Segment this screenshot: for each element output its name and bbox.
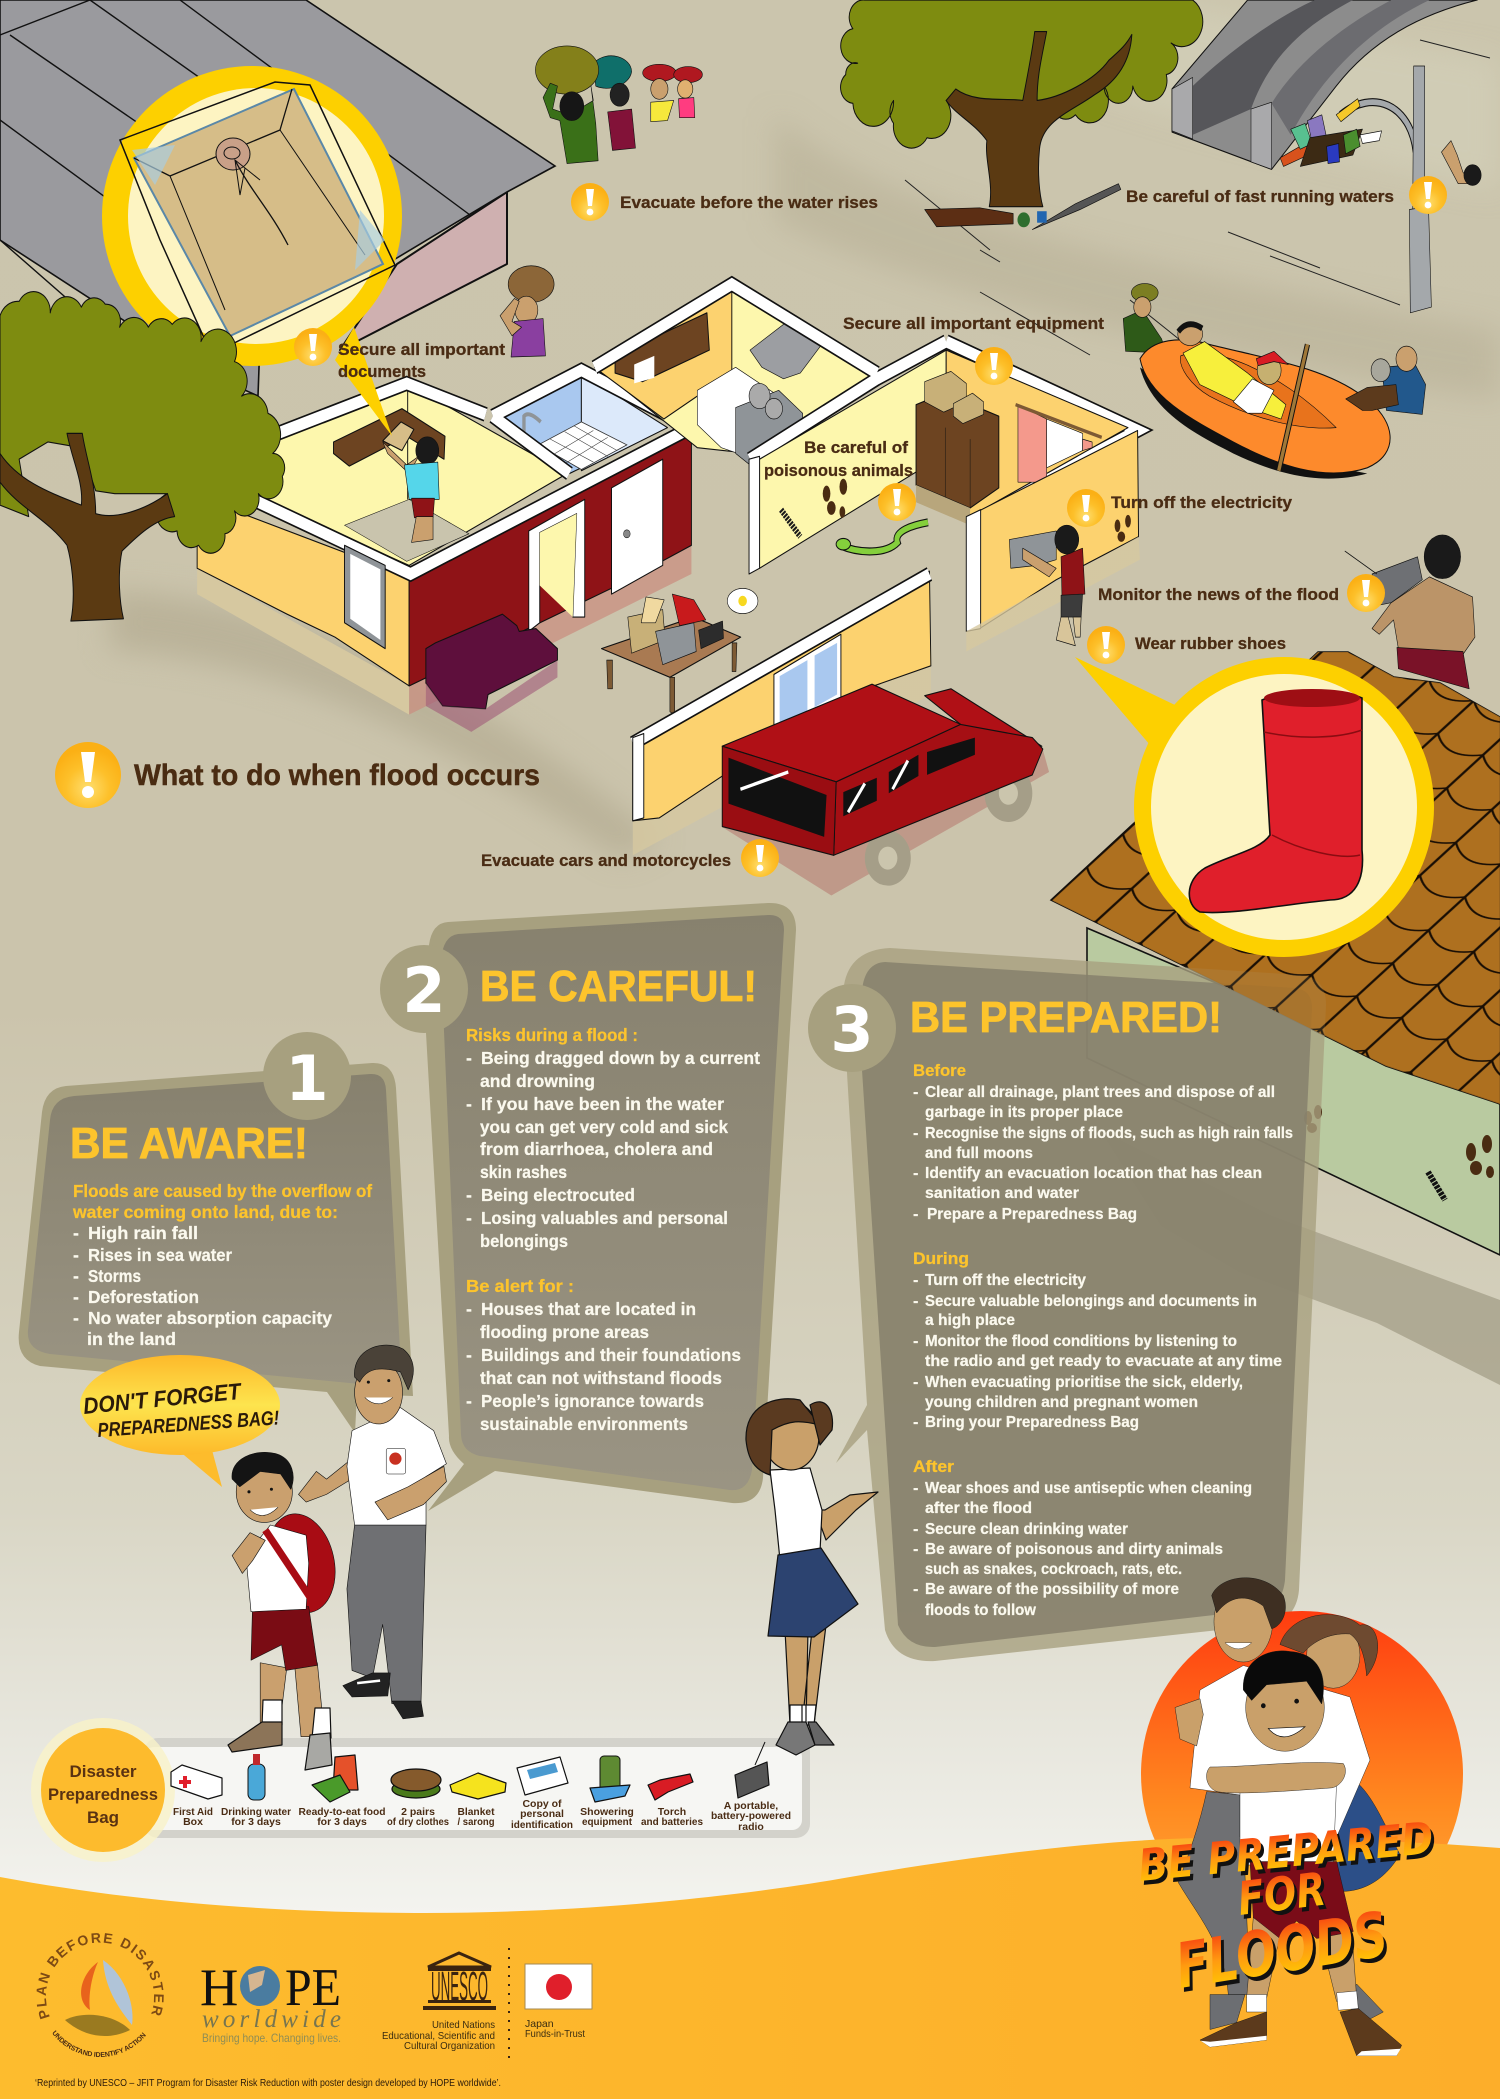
white wall tops [594, 284, 1138, 519]
panel 3: be prepared: Recognise the signs of floods, such as high rain falls [925, 1125, 1293, 1142]
label: poisonous animals: Be careful of [804, 438, 908, 457]
panel 3: be prepared: Prepare a Preparedness Bag [927, 1206, 1137, 1223]
logo: unesco: Educational, Scientific and [382, 2030, 495, 2042]
red front wall [409, 428, 691, 686]
debris at tree [925, 208, 1013, 227]
shower label [580, 1806, 634, 1828]
logo: japan funds-in-trust: Japan [525, 2018, 554, 2030]
clothes label [387, 1806, 449, 1828]
icon: torch [648, 1774, 693, 1800]
credit line: ‘Reprinted by UNESCO – JFIT Program for Disaster Risk Reduction with poster design developed by HOPE worldwide’. [35, 2078, 501, 2089]
bag badge: Preparedness [48, 1785, 158, 1804]
panel 3: be prepared: During [913, 1250, 969, 1268]
logo: hope worldwide: H [200, 1959, 238, 2017]
panel 3: be prepared: When evacuating prioritise the sick, elderly, [925, 1374, 1243, 1391]
panel 1: be aware: 1 [285, 1042, 329, 1115]
title: be prepared for floods: FLOODS [1171, 1897, 1393, 2003]
panel 2: be careful: Houses that are located in [481, 1299, 696, 1319]
insects on wall [1304, 1105, 1494, 1178]
panel 3: be prepared: Monitor the flood conditions by listening to [925, 1333, 1237, 1350]
panel 2: be careful: - [466, 1185, 472, 1205]
label: secure equipment [843, 314, 1104, 385]
character: girl [746, 1399, 878, 1755]
title: be prepared for floods: FLOODS [1174, 1901, 1396, 2007]
torch label [641, 1806, 703, 1828]
logo: plan before disaster: PLAN BEFORE DISASTER [36, 1933, 164, 2020]
blanket label: Blanket [458, 1806, 495, 1818]
panel 2: be careful: BE CAREFUL! [480, 962, 757, 1011]
elderly pair [1382, 364, 1426, 414]
panel 3: be prepared: Clear all drainage, plant trees and dispose of all [925, 1084, 1275, 1101]
icon: water bottle [248, 1754, 265, 1800]
panel 3: be prepared: 3 [830, 993, 874, 1066]
water label [221, 1806, 291, 1828]
panel 2: be careful: If you have been in the water [481, 1094, 724, 1114]
sofa [426, 614, 557, 709]
title: be prepared for floods: FOR [1238, 1866, 1332, 1930]
cabinet [334, 409, 445, 466]
panel 2: be careful: belongings [480, 1231, 568, 1251]
left tree and trunk [0, 292, 285, 621]
front wall with windows [633, 571, 931, 855]
logo: unesco: United Nations [432, 2019, 495, 2031]
panel 3: be prepared: - [913, 1293, 918, 1310]
panel 1: be aware: Deforestation [88, 1287, 199, 1307]
kitchen cabinet [615, 313, 709, 382]
panel 3: be prepared: young children and pregnant women [925, 1394, 1198, 1411]
electrical box [1009, 531, 1056, 568]
man at fuse box [1023, 525, 1085, 646]
insects [823, 479, 1131, 542]
clothes label: of dry clothes [387, 1816, 449, 1828]
panel 3: be prepared: BE PREPARED! [910, 993, 1222, 1042]
lamp [1341, 102, 1416, 152]
label: monitor news [1098, 574, 1385, 612]
top tree [841, 0, 1203, 230]
panel 3: be prepared: Before [913, 1062, 966, 1080]
torch label: and batteries [641, 1816, 703, 1828]
logo: japan funds-in-trust: Funds-in-Trust [525, 2028, 585, 2040]
label: evacuate cars: Evacuate cars and motorcycles [481, 851, 731, 870]
panel 3: be prepared: Turn off the electricity [925, 1272, 1086, 1289]
label: poisonous animals [764, 438, 916, 521]
panel 2: be careful: sustainable environments [480, 1414, 688, 1434]
panel 2: be careful: - [466, 1345, 472, 1365]
roof tiles seen through panel 3 [1051, 652, 1500, 1104]
panel 3: be prepared: and full moons [925, 1145, 1033, 1162]
torch label: Torch [658, 1806, 686, 1818]
dotted divider [508, 1948, 510, 2062]
panel 3: be prepared: - [913, 1414, 918, 1431]
panel 1: be aware [19, 1032, 413, 1433]
label: turn off electricity: Turn off the electricity [1111, 493, 1293, 512]
panel 2: be careful: skin rashes [480, 1162, 567, 1182]
centipede [781, 510, 800, 537]
logo: plan before disaster [36, 1933, 164, 2057]
blanket label [458, 1806, 495, 1828]
panel 3: be prepared: After [913, 1458, 955, 1476]
shower label: Showering [580, 1806, 634, 1818]
label: monitor news: Monitor the news of the flood [1098, 585, 1339, 604]
icon: identification [517, 1757, 568, 1795]
woman with bundle [500, 266, 554, 357]
panel 3: be prepared: - [913, 1581, 918, 1598]
panel 3: be prepared: the radio and get ready to evacuate at any time [925, 1353, 1282, 1370]
cooker hood [750, 323, 822, 379]
label: secure documents: documents [338, 362, 426, 381]
identification label: personal [520, 1808, 564, 1820]
panel 2: be careful: you can get very cold and sick [480, 1117, 728, 1137]
logo: plan before disaster: UNDERSTAND IDENTIFY ACTION [52, 2030, 146, 2057]
logo: unesco: Cultural Organization [404, 2040, 495, 2052]
character: older boy [298, 1345, 446, 1719]
snake [836, 522, 928, 551]
panel 2: be careful: Risks during a flood : [466, 1025, 638, 1045]
white wall tops [246, 370, 691, 574]
icon: food [312, 1755, 358, 1802]
water reflections [197, 568, 409, 715]
bathroom [493, 373, 581, 474]
panel 1: be aware: Storms [88, 1266, 141, 1286]
water label: Drinking water [221, 1806, 291, 1818]
panel 3: be prepared: Wear shoes and use antiseptic when cleaning [925, 1480, 1252, 1497]
panel 3: be prepared: - [913, 1333, 918, 1350]
radio label: A portable, [724, 1800, 778, 1812]
people evacuating with bundles [535, 46, 702, 164]
three children [1175, 1578, 1402, 2056]
logo: hope worldwide: Bringing hope. Changing lives. [202, 2031, 341, 2045]
bridge [1172, 0, 1477, 169]
panel 3: be prepared: - [913, 1084, 918, 1101]
callout: documents magnifier [102, 66, 402, 436]
panel 1: be aware: in the land [87, 1329, 176, 1349]
pink wall [340, 192, 507, 350]
food label: Ready-to-eat food [298, 1806, 386, 1818]
back room walls [760, 350, 946, 568]
panel 3: be prepared: - [913, 1521, 918, 1538]
label: secure documents [294, 328, 505, 381]
kitchen floor [597, 287, 877, 453]
panel 2: be careful: - [466, 1299, 472, 1319]
clothes label: 2 pairs [401, 1806, 435, 1818]
panel 3: be prepared: Be aware of poisonous and dirty animals [925, 1541, 1223, 1558]
disaster preparedness bag strip [31, 1718, 810, 1862]
plastic wrapped envelope [120, 82, 395, 345]
rescue raft with people [1123, 284, 1426, 479]
panel 3: be prepared: - [913, 1272, 918, 1289]
panel 1: be aware: High rain fall [88, 1223, 198, 1243]
blanket label: / sarong [458, 1816, 494, 1828]
panel 3: be prepared: after the flood [925, 1500, 1032, 1517]
panel 3: be prepared: - [913, 1125, 918, 1142]
panel 1: be aware: - [73, 1287, 79, 1307]
speech bubble: preparedness bag [80, 1355, 280, 1487]
panel 3: be prepared: - [913, 1206, 918, 1223]
water flow lines [905, 40, 1490, 355]
panel 1: be aware: No water absorption capacity [88, 1308, 332, 1328]
label: fast running waters [1126, 176, 1447, 214]
panel 3: be prepared: Secure clean drinking water [925, 1521, 1128, 1538]
car windows [728, 738, 975, 837]
icon: clothes [391, 1769, 441, 1798]
first aid label: First Aid [173, 1806, 213, 1818]
house 1 with rooms [197, 370, 691, 732]
flood water bands [110, 0, 1500, 860]
icon: first aid box [171, 1765, 222, 1799]
panel 3: be prepared: a high place [925, 1312, 1015, 1329]
label: secure documents: Secure all important [338, 340, 505, 359]
lying person [1183, 342, 1286, 419]
panel 2: be careful: that can not withstand floods [480, 1368, 722, 1388]
outer right wall [968, 430, 1139, 629]
logo: japan funds-in-trust [525, 1964, 592, 2040]
icon: blanket [450, 1773, 506, 1799]
bag badge [31, 1718, 175, 1862]
title: be prepared for floods: FOR [1235, 1862, 1329, 1926]
panel 3: be prepared: Be aware of the possibility of more [925, 1581, 1179, 1598]
panel 2: be careful: - [466, 1391, 472, 1411]
debris and street lamp [1280, 66, 1481, 313]
panel 2: be careful: 2 [402, 954, 446, 1027]
radio label [711, 1800, 791, 1833]
doors [529, 499, 585, 631]
callout: rubber boot [1075, 657, 1434, 957]
panel 3: be prepared: Secure valuable belongings and documents in [925, 1293, 1257, 1310]
panel 3: be prepared: such as snakes, cockroach, rats, etc. [925, 1561, 1182, 1578]
label: rubber shoes [1087, 626, 1286, 664]
logo: unesco [382, 1953, 496, 2052]
label: poisonous animals: poisonous animals [764, 461, 913, 480]
food label: for 3 days [317, 1816, 367, 1828]
logo: hope worldwide: worldwide [202, 2006, 341, 2033]
label: turn off electricity [1067, 489, 1293, 527]
label: evacuate before water rises: Evacuate before the water rises [620, 193, 878, 212]
panel 2: be careful: and drowning [480, 1071, 595, 1091]
first aid label: Box [183, 1816, 203, 1828]
logo: hope worldwide: PE [285, 1959, 341, 2017]
man with radio [1345, 535, 1475, 689]
panel 2: be careful: Losing valuables and personal [481, 1208, 728, 1228]
panel 2: be careful: - [466, 1048, 472, 1068]
panel 1: be aware: BE AWARE! [70, 1119, 308, 1168]
stove [697, 367, 803, 459]
panel 1: be aware: - [73, 1266, 79, 1286]
room interior [246, 383, 567, 565]
radio label: radio [738, 1821, 764, 1833]
man pushing raft [1123, 310, 1166, 353]
main heading with warning icon: What to do when flood occurs [134, 759, 540, 792]
label: evacuate cars [481, 839, 779, 877]
character: younger boy with backpack [232, 1452, 344, 1737]
wardrobe [916, 393, 999, 508]
panel 3: be prepared: Identify an evacuation location that has clean [925, 1165, 1262, 1182]
panel 2: be careful: Buildings and their foundations [481, 1345, 741, 1365]
red car [721, 684, 1049, 895]
panel 3: be prepared: garbage in its proper place [925, 1104, 1123, 1121]
label: fast running waters: Be careful of fast running waters [1126, 187, 1394, 206]
car body [925, 689, 1042, 746]
identification label: identification [511, 1819, 573, 1831]
title: be prepared for floods [1136, 1813, 1439, 2007]
yellow side wall [197, 497, 409, 686]
radio label: battery-powered [711, 1810, 791, 1822]
shower label: equipment [582, 1816, 632, 1828]
table with saved items [601, 588, 758, 715]
water label: for 3 days [231, 1816, 281, 1828]
roof tiles [1051, 652, 1500, 1104]
label: evacuate before water rises [571, 183, 878, 221]
panel 1: be aware: - [73, 1308, 79, 1328]
bag badge: Disaster [69, 1762, 137, 1781]
kitchen wall [594, 290, 732, 419]
identification label [511, 1798, 573, 1831]
panel 1: be aware: - [73, 1245, 79, 1265]
bag badge: Bag [87, 1808, 119, 1827]
drowning man [1441, 141, 1473, 184]
panel 3: be prepared: - [913, 1541, 918, 1558]
boy with oar [1233, 379, 1274, 413]
panel 2: be careful: Being electrocuted [481, 1185, 635, 1205]
logo: unesco: UNESCO [431, 1964, 488, 2009]
icon: shower kit [590, 1756, 630, 1802]
label: secure equipment: Secure all important equipment [843, 314, 1104, 333]
curtains [1018, 405, 1047, 482]
logo: hope worldwide [200, 1959, 341, 2045]
panel 3: be prepared: - [913, 1374, 918, 1391]
window [345, 545, 385, 649]
main heading with warning icon [55, 742, 540, 808]
footer band [0, 1838, 1500, 2099]
label: rubber shoes: Wear rubber shoes [1135, 634, 1286, 653]
panel 3: be prepared: sanitation and water [925, 1185, 1079, 1202]
panel 2: be careful: - [466, 1208, 472, 1228]
orange sun [1141, 1611, 1463, 1937]
speech bubble: preparedness bag: DON'T FORGET [82, 1378, 244, 1419]
identification label: Copy of [522, 1798, 562, 1810]
panel 2: be careful: Be alert for : [466, 1276, 574, 1296]
boy socks and shoes [228, 1700, 332, 1770]
food label [298, 1806, 386, 1828]
icon: radio [735, 1742, 769, 1798]
panel 2: be careful: Being dragged down by a current [481, 1048, 760, 1068]
panel 3: be prepared: - [913, 1165, 918, 1182]
title: be prepared for floods: BE PREPARED [1136, 1813, 1436, 1892]
building roof top left [0, 0, 555, 396]
title: be prepared for floods: BE PREPARED [1139, 1817, 1439, 1896]
panel 3: be prepared: - [913, 1480, 918, 1497]
house 2 kitchen and back room [594, 284, 1140, 651]
panel 1: be aware: Floods are caused by the overflow of [73, 1181, 372, 1201]
panel 2: be careful: - [466, 1094, 472, 1114]
first aid label [173, 1806, 213, 1828]
house wall [1087, 928, 1500, 1255]
panel 3: be prepared: Bring your Preparedness Bag [925, 1414, 1139, 1431]
panel 1: be aware: Rises in sea water [88, 1245, 232, 1265]
panel 3: be prepared [808, 948, 1326, 1661]
boxes on wardrobe [925, 371, 966, 412]
speech bubble: preparedness bag: PREPAREDNESS BAG! [97, 1407, 280, 1442]
person storing documents [383, 437, 439, 542]
panel 2: be careful: flooding prone areas [480, 1322, 649, 1342]
panel 2: be careful [380, 903, 796, 1511]
panel 2: be careful: from diarrhoea, cholera and [480, 1139, 713, 1159]
panel 1: be aware: water coming onto land, due to: [72, 1202, 338, 1222]
panel 1: be aware: - [73, 1223, 79, 1243]
panel 3: be prepared: floods to follow [925, 1602, 1037, 1619]
panel 2: be careful: People’s ignorance towards [481, 1391, 704, 1411]
house with tiled roof [1051, 652, 1500, 1385]
